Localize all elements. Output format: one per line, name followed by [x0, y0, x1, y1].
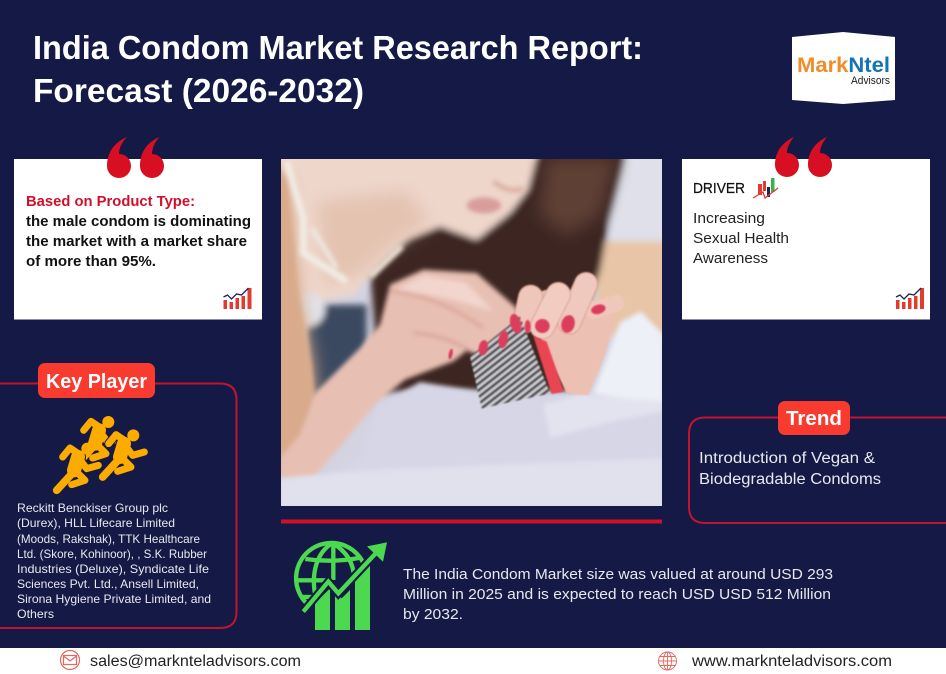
footer bar — [0, 648, 946, 674]
product type text: the male condom is dominating — [26, 214, 251, 230]
icon: small bar chart — [896, 288, 924, 309]
product type text: of more than 95%. — [26, 254, 156, 270]
key player list: (Moods, Rakshak), TTK Healthcare — [17, 532, 200, 546]
key player badge: Key Player — [46, 371, 147, 393]
icon: globe — [658, 652, 676, 670]
key player list: Reckitt Benckiser Group plc — [17, 501, 168, 515]
trend text: Biodegradable Condoms — [699, 471, 881, 488]
email address: sales@marknteladvisors.com — [90, 653, 301, 670]
driver text: Awareness — [693, 250, 768, 267]
photo: hands holding a condom packet — [281, 159, 662, 506]
trend badge — [778, 401, 850, 435]
icon: green globe with rising chart — [296, 542, 387, 630]
key player badge — [38, 363, 155, 398]
title: India Condom Market Research Report: — [33, 29, 643, 66]
arm and left hand — [280, 270, 522, 478]
key player list — [17, 501, 211, 621]
title: Forecast (2026-2032) — [33, 72, 364, 109]
product type text: Based on Product Type: — [26, 194, 195, 210]
icon: driver growth chart — [753, 178, 778, 198]
market size text — [403, 567, 833, 623]
key player list: (Durex), HLL Lifecare Limited — [17, 516, 175, 530]
market size text: by 2032. — [403, 607, 463, 623]
logo: MarkNtel Advisors: MarkNtel — [797, 54, 890, 77]
website address: www.marknteladvisors.com — [691, 653, 892, 670]
logo: MarkNtel Advisors: Advisors — [851, 75, 890, 87]
title — [33, 29, 643, 109]
trend text — [699, 450, 881, 488]
key player list: Sciences Pvt. Ltd., Ansell Limited, — [17, 577, 199, 591]
driver text: Sexual Health — [693, 230, 789, 247]
icon: small bar chart — [224, 288, 252, 309]
key player list: Others — [17, 607, 54, 621]
icon: right card quote mark — [775, 137, 832, 177]
market size text: The India Condom Market size was valued at around USD 293 — [403, 567, 833, 583]
key player list: Industries (Deluxe), Syndicate Life — [17, 562, 209, 576]
trend text: Introduction of Vegan & — [699, 450, 876, 467]
product type text: the market with a market share — [26, 234, 247, 250]
trend badge: Trend — [786, 408, 842, 430]
product type text — [26, 194, 251, 270]
panel: trend — [689, 401, 946, 523]
driver text — [693, 210, 789, 267]
driver text: Increasing — [693, 210, 765, 227]
icon: runners — [57, 416, 144, 490]
market size text: Million in 2025 and is expected to reach USD USD 512 Million — [403, 587, 831, 603]
panel: product type — [14, 137, 262, 320]
panel: driver — [682, 137, 930, 320]
panel: key player — [0, 363, 236, 628]
logo: MarkNtel Advisors — [792, 32, 895, 104]
icon: email — [60, 650, 80, 670]
driver heading: DRIVER — [693, 180, 745, 197]
right hand — [518, 284, 617, 395]
icon: left card quote mark — [107, 137, 164, 178]
key player list: Sirona Hygiene Private Limited, and — [17, 592, 211, 606]
key player list: Ltd. (Skore, Kohinoor), , S.K. Rubber — [17, 547, 207, 561]
